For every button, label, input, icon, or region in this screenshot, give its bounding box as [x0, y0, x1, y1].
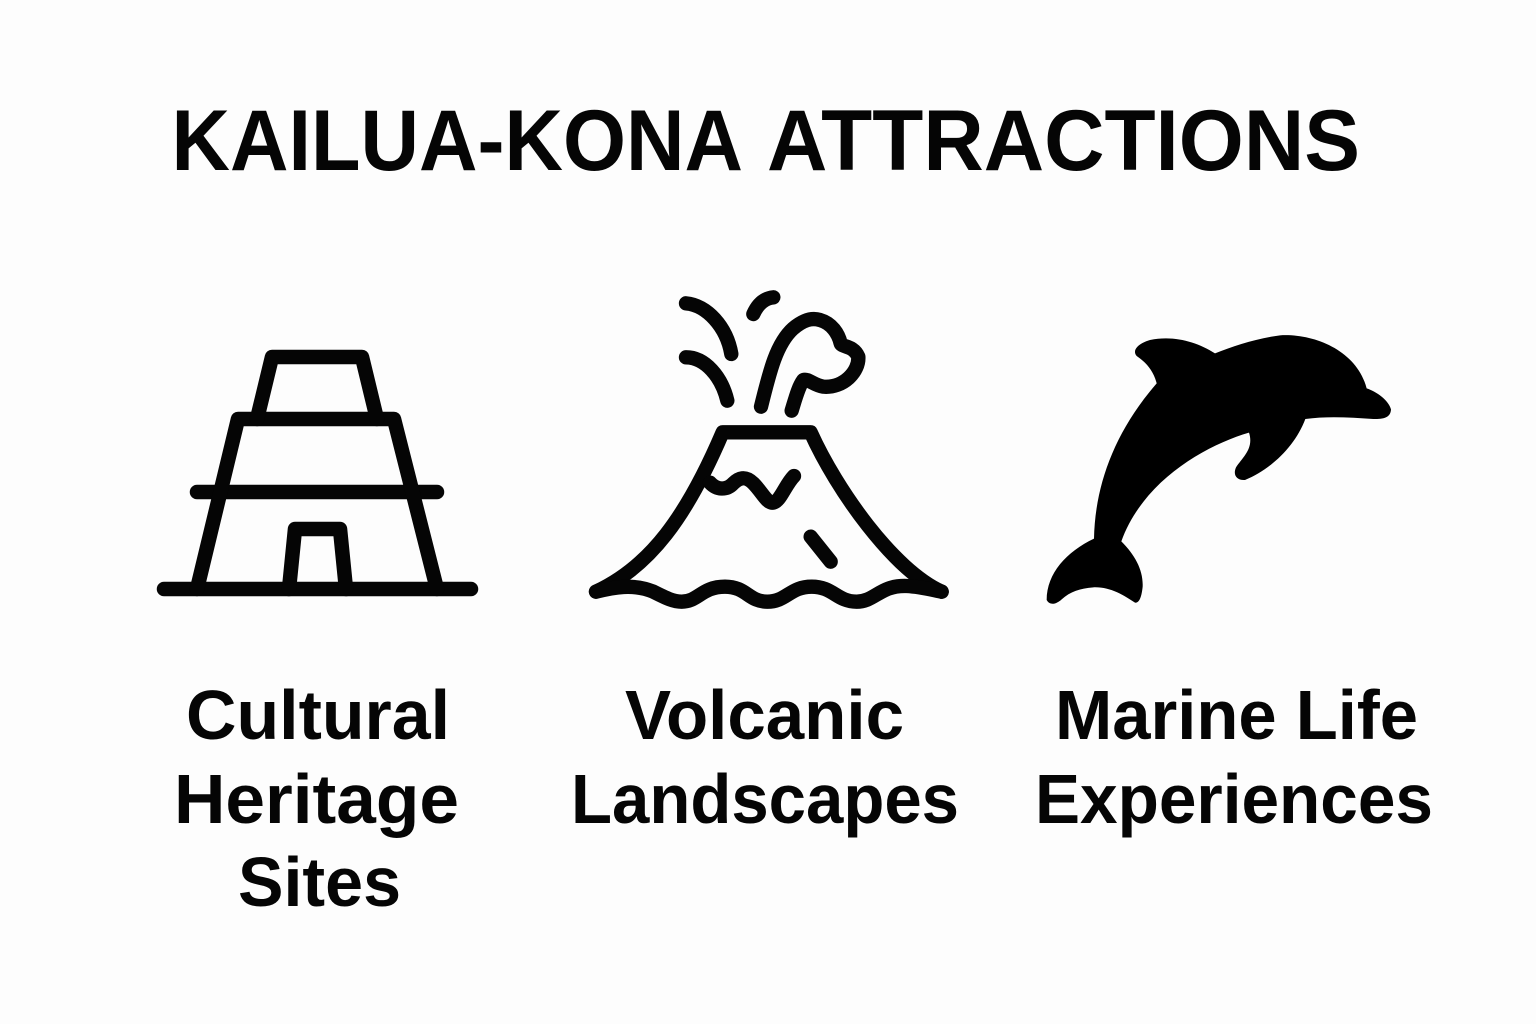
label: cultural heritage sites — [174, 676, 459, 921]
label: cultural heritage sites: Sites — [238, 843, 401, 921]
title: KAILUA-KONA — [172, 93, 743, 189]
label: volcanic landscapes: Volcanic — [625, 676, 904, 754]
label: marine life experiences — [1035, 676, 1433, 838]
label: volcanic landscapes — [571, 676, 959, 838]
title — [172, 93, 1360, 189]
title: ATTRACTIONS — [767, 93, 1360, 189]
label: marine life experiences: Experiences — [1035, 760, 1433, 838]
label: marine life experiences: Marine Life — [1055, 676, 1418, 754]
icon: volcano — [596, 297, 942, 602]
icon: cultural heritage temple — [164, 357, 471, 589]
label: cultural heritage sites: Heritage — [174, 760, 459, 838]
icon: dolphin — [1047, 335, 1391, 604]
label: cultural heritage sites: Cultural — [186, 676, 450, 754]
label: volcanic landscapes: Landscapes — [571, 760, 959, 838]
